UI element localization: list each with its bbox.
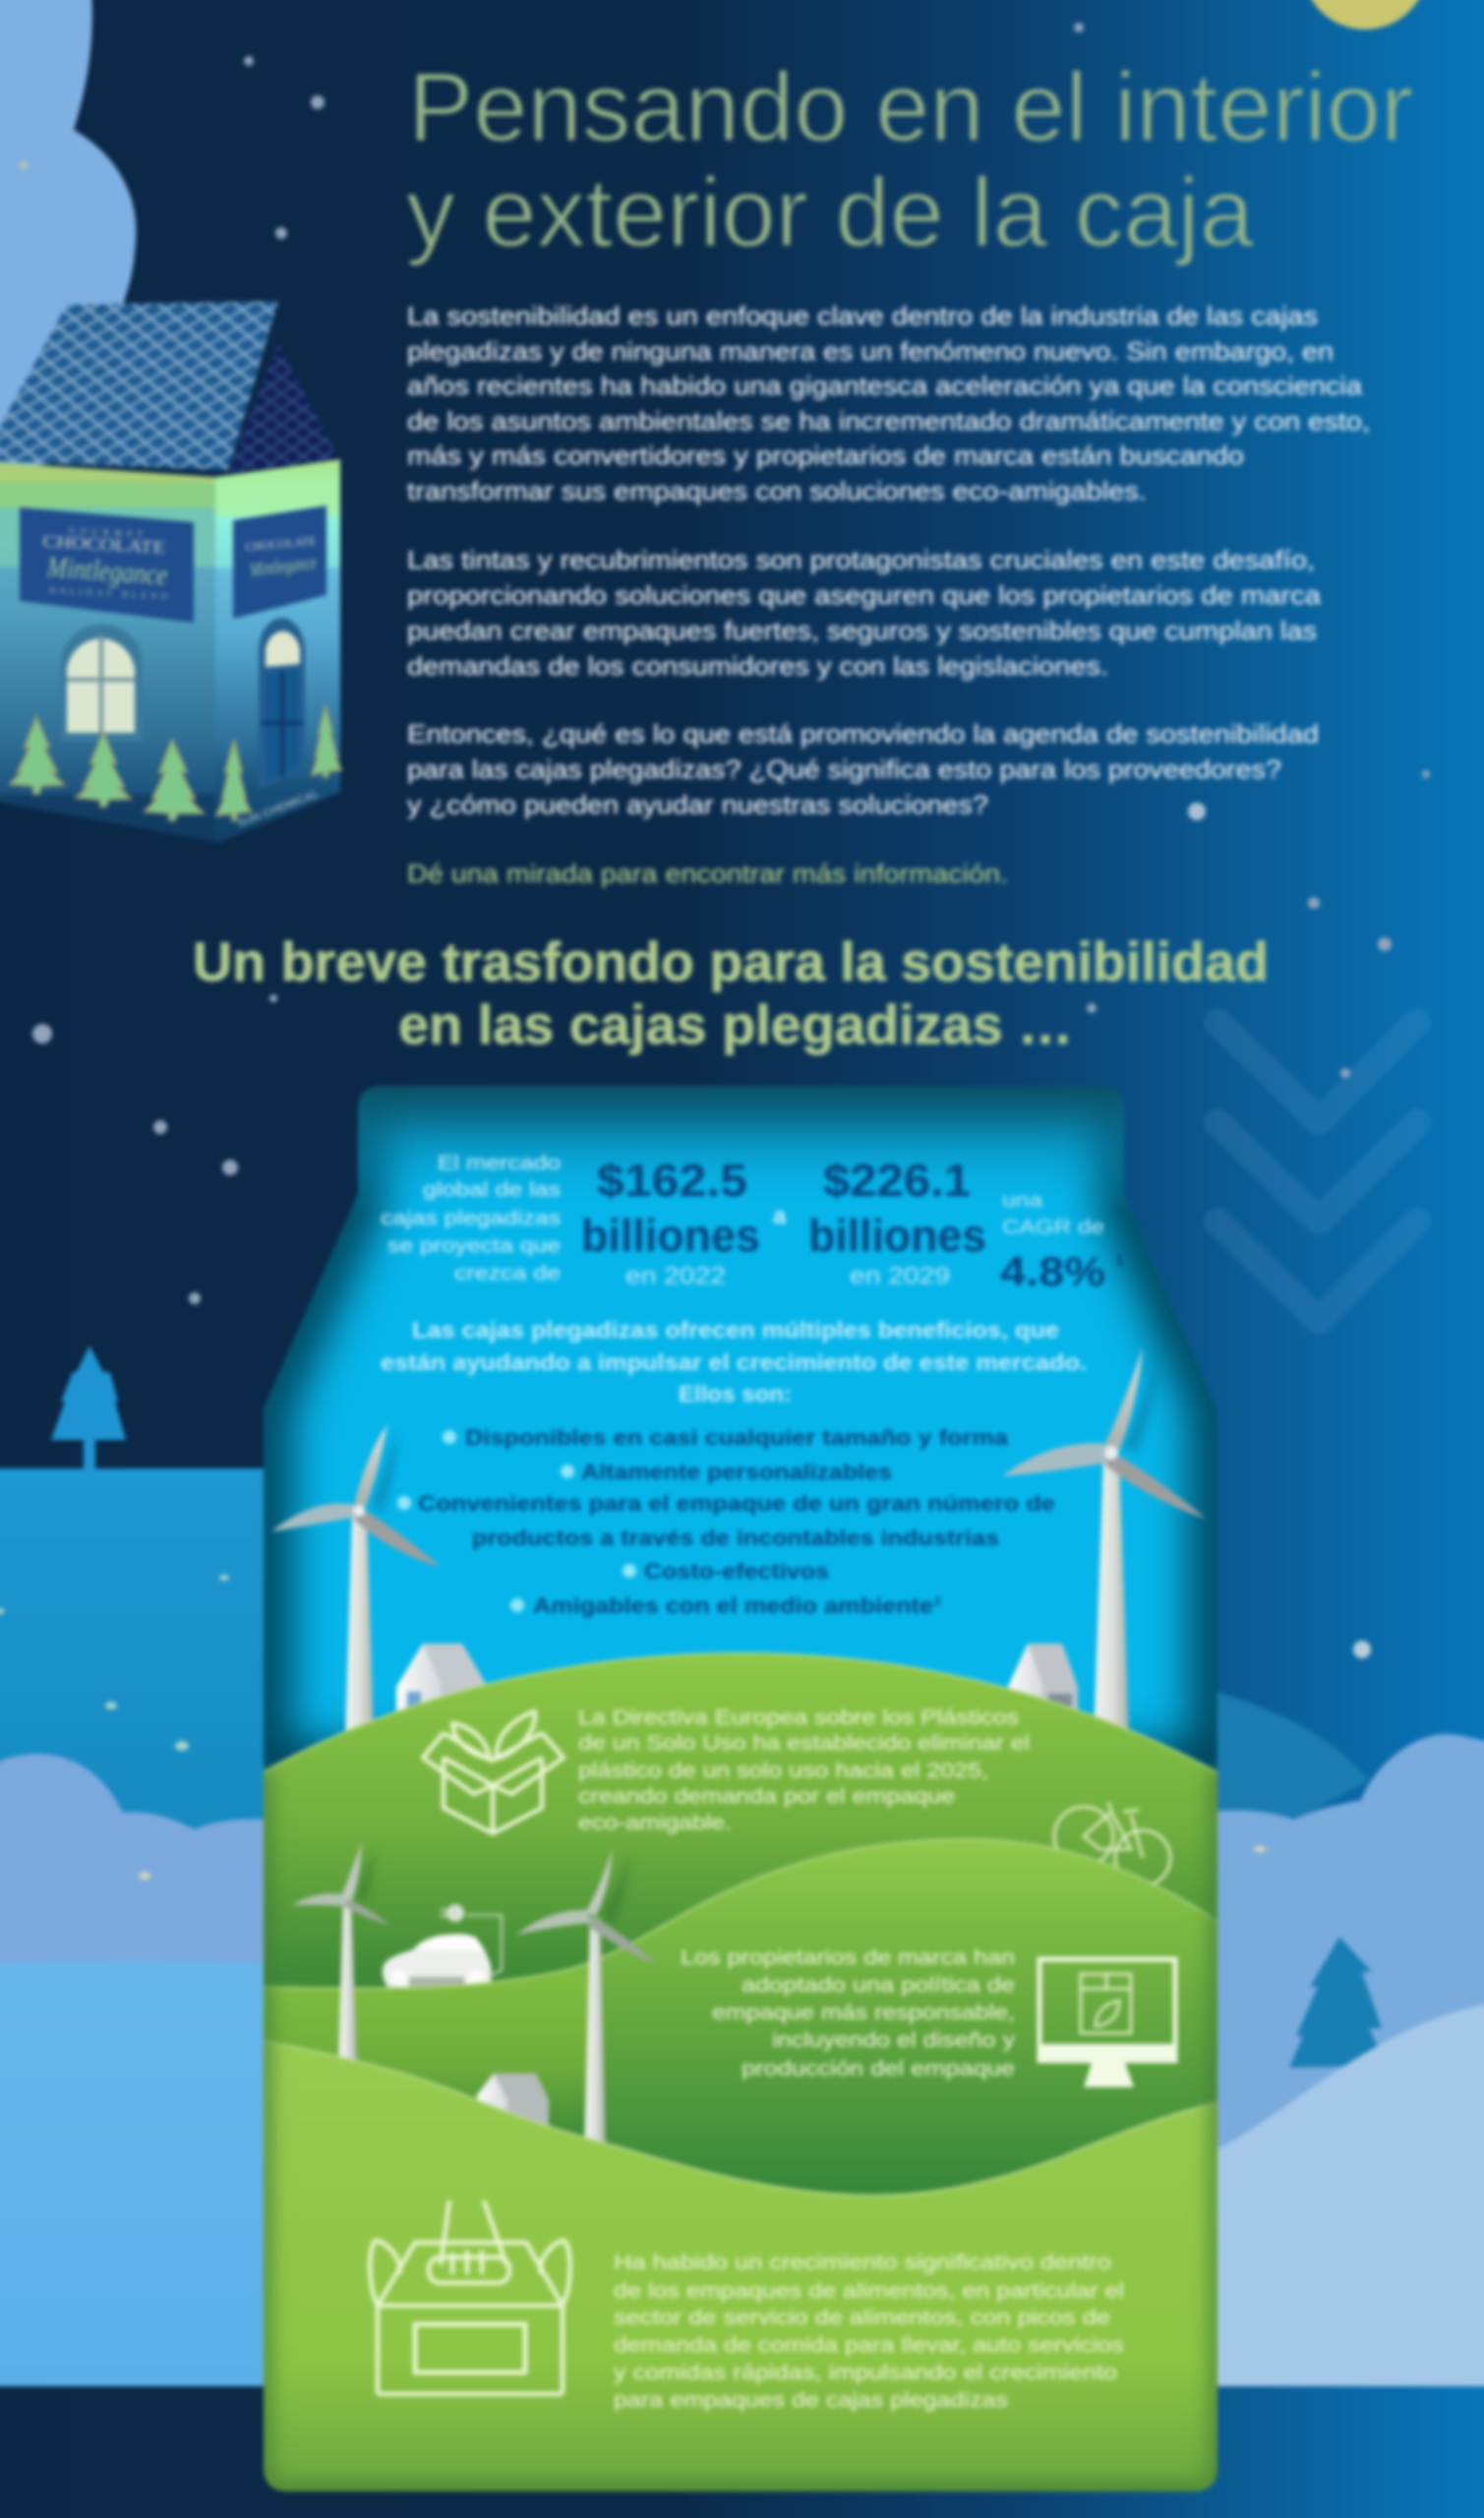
- text: European directive: creando demanda por el empaque: [578, 1785, 955, 1808]
- roof: right face: [228, 344, 339, 472]
- market stat: 2022 value: billiones: [581, 1210, 760, 1261]
- label: front: HOLIDAY BLEND: [49, 585, 168, 601]
- market stat: CAGR: una: [1002, 1190, 1043, 1212]
- section heading: en las cajas plegadizas …: [398, 993, 1073, 1055]
- icon: electric car charging: [383, 1904, 502, 1987]
- green hill: right middle: [599, 1839, 1218, 2132]
- left moonlit cloud: [0, 0, 136, 472]
- main title: Pensando en el interior: [408, 52, 1413, 161]
- carton maker mark: SUN CHEMICAL: [236, 788, 321, 830]
- benefits list: Costo-efectivos: [644, 1559, 829, 1584]
- bottom ground band: [0, 2386, 1484, 2518]
- trees on carton: [10, 706, 341, 820]
- icon: bicycles: [1054, 1802, 1170, 1886]
- text: European directive: [578, 1707, 1030, 1834]
- text: European directive: eco-amigable.: [578, 1812, 732, 1834]
- market stat: lead text: El mercado: [438, 1153, 561, 1174]
- market stat: lead text: [381, 1153, 561, 1285]
- benefits list: 2: [934, 1594, 941, 1608]
- window: [61, 625, 143, 742]
- green hill: front: [256, 2040, 1224, 2503]
- landscape: right hills: [1210, 1690, 1484, 2386]
- market stat: CAGR: CAGR de: [1002, 1217, 1104, 1238]
- benefits list: Amigables con el medio ambiente: [533, 1593, 933, 1618]
- label: front: Mintlegance: [45, 551, 169, 592]
- carton side face: [215, 459, 340, 844]
- text: food packaging: sector de servicio de alimentos, con picos de: [614, 2307, 1110, 2329]
- market stat: CAGR: 4.8%: [1000, 1248, 1105, 1294]
- label: side: CHOCOLATE: [245, 534, 317, 554]
- wind turbine: green left: [292, 1842, 390, 2066]
- carton panel: [256, 1082, 1229, 2503]
- intro text: años recientes ha habido una gigantesca aceleración ya que la consciencia: [407, 371, 1363, 400]
- text: brand owners: Los propietarios de marca han: [681, 1947, 1015, 1969]
- text: food packaging: demanda de comida para llevar, auto servicios: [614, 2334, 1124, 2357]
- sky panel fill: [262, 1102, 1217, 1764]
- intro text: [407, 301, 1370, 888]
- main title: [406, 52, 1413, 267]
- section heading: [193, 930, 1269, 1055]
- label: front: GOURMET: [69, 525, 144, 539]
- market stat: 2022 value: $162.5: [597, 1155, 747, 1206]
- chevrons pointing down: [1217, 1022, 1417, 1321]
- icon: open box with leaves: [423, 1711, 564, 1833]
- text: brand owners: empaque más responsable,: [712, 2002, 1015, 2024]
- text: brand owners: [681, 1947, 1016, 2080]
- label: side: [233, 506, 326, 619]
- text: European directive: plástico de un solo uso hacia el 2025,: [578, 1760, 988, 1782]
- intro text: de los asuntos ambientales se ha incrementado dramáticamente y con esto,: [407, 406, 1370, 436]
- roof: left face: [0, 301, 278, 470]
- door: [259, 618, 305, 789]
- market stat: lead text: cajas plegadizas: [381, 1208, 561, 1229]
- text: food packaging: [614, 2251, 1124, 2412]
- tree on left hill: [51, 1346, 126, 1470]
- intro text: para las cajas plegadizas? ¿Qué significa esto para los proveedores?: [407, 754, 1281, 784]
- market stat: lead text: crezca de: [454, 1263, 561, 1285]
- intro text: proporcionando soluciones que aseguren que los propietarios de marca: [407, 580, 1322, 610]
- benefits list: Disponibles en casi cualquier tamaño y forma: [465, 1425, 1009, 1450]
- benefits list: [397, 1425, 1055, 1618]
- left pale blue hill: [0, 1961, 280, 2386]
- text: European directive: de un Solo Uso ha establecido eliminar el: [578, 1732, 1030, 1755]
- market stat: 2022 value: [581, 1155, 760, 1289]
- green hill: back: [261, 1649, 1220, 1991]
- benefits introduction: Las cajas plegadizas ofrecen múltiples beneficios, que: [412, 1317, 1059, 1343]
- intro text: más y más convertidores y propietarios de marca están buscando: [407, 441, 1244, 470]
- text: European directive: La Directiva Europea sobre los Plásticos: [578, 1707, 1019, 1729]
- intro text: Dé una mirada para encontrar más información.: [407, 859, 1008, 888]
- carton front face: [0, 461, 215, 842]
- benefits list: productos a través de incontables industrias: [472, 1526, 999, 1550]
- intro text: transformar sus empaques con soluciones eco-amigables.: [407, 476, 1147, 506]
- green hill: left low: [266, 1966, 588, 2101]
- tree on right hill: [1289, 1937, 1387, 2068]
- benefits list: Convenientes para el empaque de un gran número de: [418, 1491, 1055, 1516]
- text: food packaging: Ha habido un crecimiento significativo dentro: [614, 2251, 1111, 2274]
- inner shadow of sky panel: [264, 1086, 1217, 1770]
- text: brand owners: producción del empaque: [742, 2058, 1015, 2080]
- connector word: a: [773, 1203, 787, 1229]
- landscape: left hills: [0, 1346, 280, 2386]
- text: brand owners: adoptado una política de: [742, 1974, 1015, 1997]
- market stat: 2029 value: [808, 1155, 986, 1289]
- market stat: CAGR: [1000, 1190, 1124, 1294]
- benefits introduction: están ayudando a impulsar el crecimiento de este mercado.: [381, 1349, 1087, 1375]
- label: side: Mintlegance: [248, 552, 318, 581]
- wind turbine: green centre: [516, 1847, 656, 2154]
- hill stars: [0, 1575, 229, 1751]
- wind turbine: sky left: [271, 1424, 441, 1770]
- intro text: demandas de los consumidores y con las legislaciones.: [407, 651, 1108, 681]
- moon: [1302, 0, 1428, 30]
- intro text: Entonces, ¿qué es lo que está promoviendo la agenda de sostenibilidad: [407, 719, 1319, 749]
- intro text: y ¿cómo pueden ayudar nuestras soluciones?: [407, 790, 988, 819]
- house in hills: [474, 2069, 553, 2128]
- market stat: lead text: se proyecta que: [387, 1235, 561, 1257]
- main title: y exterior de la caja: [406, 157, 1255, 267]
- icon: takeaway food box: [370, 2200, 570, 2394]
- section heading: Un breve trasfondo para la sostenibilidad: [193, 930, 1269, 992]
- house left: [392, 1640, 488, 1713]
- market stat: 2029 value: billiones: [808, 1210, 986, 1261]
- text: brand owners: incluyendo el diseño y: [772, 2029, 1016, 2052]
- hill highlight line: [258, 1839, 1224, 1989]
- market stat: 2022 value: en 2022: [625, 1263, 726, 1289]
- benefits list: Altamente personalizables: [581, 1460, 892, 1484]
- left cloud: [0, 1754, 280, 1977]
- benefits introduction: Ellos son:: [679, 1381, 792, 1407]
- benefits introduction: [381, 1317, 1087, 1407]
- right pale hill: [1210, 2002, 1484, 2386]
- stars: [20, 23, 1430, 1658]
- house right: [1005, 1640, 1082, 1711]
- label: front: [20, 508, 194, 623]
- folding carton house illustration: [0, 301, 341, 844]
- market stat: lead text: global de las: [423, 1179, 561, 1201]
- market stat: 2029 value: $226.1: [823, 1155, 971, 1206]
- label: front: CHOCOLATE: [42, 531, 166, 558]
- text: food packaging: para empaques de cajas plegadizas: [614, 2389, 1008, 2412]
- intro text: plegadizas y de ninguna manera es un fenómeno nuevo. Sin embargo, en: [407, 336, 1334, 366]
- intro text: puedan crear empaques fuertes, seguros y sostenibles que cumplan las: [407, 616, 1317, 645]
- side shading of carton: [264, 1770, 1217, 2491]
- text: food packaging: y comidas rápidas, impulsando el crecimiento: [614, 2362, 1117, 2384]
- intro text: La sostenibilidad es un enfoque clave dentro de la industria de las cajas: [407, 301, 1318, 330]
- text: food packaging: de los empaques de alimentos, en particular el: [614, 2280, 1124, 2303]
- icon: monitor with package: [1039, 1959, 1175, 2087]
- market stat: CAGR: 1: [1115, 1252, 1124, 1269]
- wind turbine: sky right: [1002, 1348, 1206, 1741]
- market stat: 2029 value: en 2029: [850, 1263, 950, 1289]
- intro text: Las tintas y recubrimientos son protagonistas cruciales en este desafío,: [407, 545, 1315, 574]
